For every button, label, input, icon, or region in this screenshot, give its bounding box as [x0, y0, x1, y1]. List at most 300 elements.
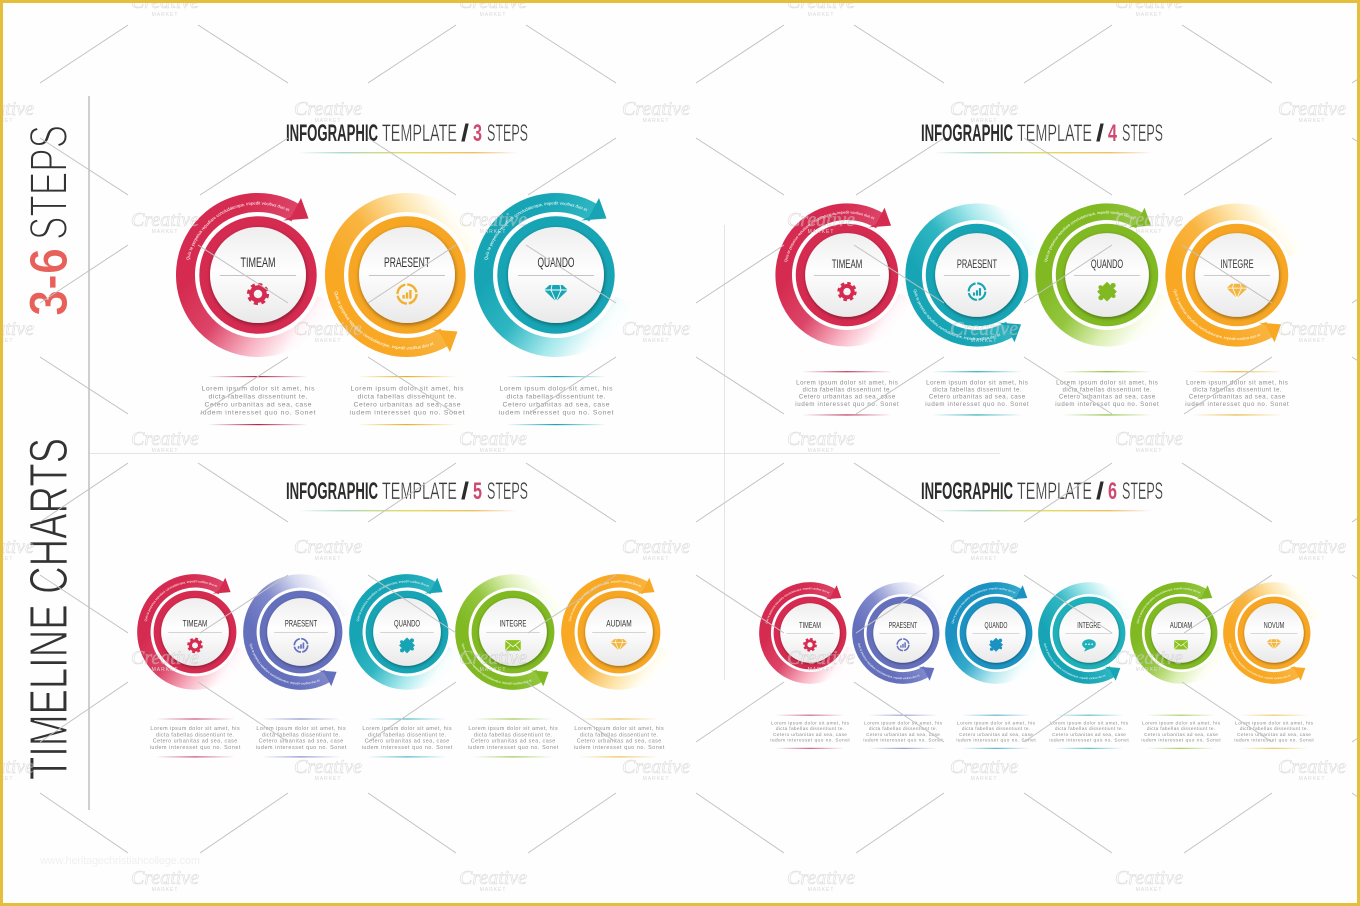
- text block: 4 steps PRAESENT: iudem interesset quo no. Sonet: [925, 401, 1029, 408]
- watermark logos: Creative: [787, 209, 855, 231]
- watermark logos: MARKET: [971, 118, 997, 124]
- title: 3 steps: [286, 120, 528, 153]
- arrow ring: [462, 581, 561, 686]
- text block: 6 steps TIMEAM: [770, 715, 850, 749]
- text block: 3 steps QUANDO: Lorem ipsum dolor sit amet, his: [500, 386, 613, 392]
- title: 3 steps: STEPS: [487, 120, 528, 147]
- disc: [359, 227, 455, 323]
- disc: [805, 233, 889, 317]
- text block: 4 steps INTEGRE: dicta fabellas dissentiunt te.: [1192, 386, 1282, 393]
- arrow ring: [185, 198, 326, 347]
- watermark logos: MARKET: [315, 338, 341, 344]
- title: 5 steps: 5: [473, 478, 482, 505]
- watermark logos: MARKET: [808, 667, 834, 673]
- disc: [1059, 603, 1119, 663]
- arrow ring: [858, 588, 945, 681]
- watermark logos: MARKET: [808, 12, 834, 18]
- step: PRAESENT: [324, 193, 477, 357]
- title: 3 steps: INFOGRAPHIC: [286, 120, 378, 147]
- arrow ring: [1229, 588, 1316, 681]
- arrow caption: Quis te perpetua repudiare concludaturque, impedit vocibus duo et: [144, 580, 217, 622]
- icon: puzzle: [989, 638, 1003, 652]
- text block: 6 steps PRAESENT: dicta fabellas dissentiunt te.: [869, 726, 937, 731]
- title: 6 steps: STEPS: [1122, 478, 1163, 505]
- text block: 6 steps QUANDO: dicta fabellas dissentiunt te.: [962, 726, 1030, 731]
- text block: 4 steps INTEGRE: Lorem ipsum dolor sit amet, his: [1186, 379, 1288, 386]
- watermark logos: MARKET: [1136, 12, 1162, 18]
- label: TIMEAM: [240, 255, 276, 270]
- title: 5 steps: [286, 478, 528, 511]
- inner ring: [472, 591, 554, 673]
- arrow ring: [356, 578, 455, 683]
- label: QUANDO: [1091, 258, 1123, 271]
- arrow caption: Quis te perpetua repudiare concludaturque, impedit vocibus duo et: [356, 580, 429, 622]
- text block: 3 steps QUANDO: Cetero urbanitas ad sea, case: [503, 402, 610, 408]
- watermark logos: Creative: [950, 756, 1018, 778]
- watermark logos: Creative: [787, 867, 855, 889]
- icon: diamond: [544, 285, 568, 302]
- title: 4 steps: TEMPLATE: [1017, 120, 1092, 147]
- title: 4 steps: STEPS: [1122, 120, 1163, 147]
- text block: 3 steps QUANDO: iudem interesset quo no. Sonet: [498, 410, 614, 416]
- text block: 6 steps PRAESENT: Cetero urbanitas ad sea, case: [866, 732, 940, 737]
- arrow caption: Quis te perpetua repudiare concludaturque, impedit vocibus duo et: [1044, 210, 1134, 262]
- arrow caption: Quis te perpetua repudiare concludaturque, impedit vocibus duo et: [858, 643, 920, 680]
- watermark logos: MARKET: [643, 776, 669, 782]
- text block: 4 steps TIMEAM: dicta fabellas dissentiunt te.: [802, 386, 892, 393]
- disc: [210, 227, 306, 323]
- disc: [873, 603, 933, 663]
- watermark logos: MARKET: [971, 556, 997, 562]
- step: PRAESENT: [852, 582, 941, 684]
- arrow caption: Quis te perpetua repudiare concludaturque, impedit vocibus duo et: [1044, 643, 1106, 680]
- watermark logos: MARKET: [1136, 887, 1162, 893]
- text block: 3 steps QUANDO: [498, 376, 614, 425]
- watermark logos: MARKET: [643, 338, 669, 344]
- watermark logos: MARKET: [1136, 229, 1162, 235]
- watermark logos: MARKET: [808, 448, 834, 454]
- label: QUANDO: [394, 618, 420, 629]
- text block: 4 steps TIMEAM: iudem interesset quo no. Sonet: [795, 401, 899, 408]
- disc: [267, 598, 335, 666]
- watermark logos: Creative: [131, 647, 199, 669]
- text block: 5 steps PRAESENT: Lorem ipsum dolor sit amet, his: [256, 726, 346, 732]
- icon: chat: [1082, 639, 1096, 652]
- label: PRAESENT: [285, 618, 317, 629]
- arrow ring: [765, 585, 852, 678]
- label: NOVUM: [1264, 620, 1284, 630]
- text block: 5 steps PRAESENT: dicta fabellas dissentiunt te.: [262, 732, 340, 738]
- watermark logos: Creative: [1115, 647, 1183, 669]
- label: AUDIAM: [606, 618, 632, 629]
- text block: 3 steps QUANDO: dicta fabellas dissentiunt te.: [506, 394, 606, 400]
- arrow caption: Quis te perpetua repudiare concludaturque, impedit vocibus duo et: [784, 210, 874, 262]
- text block: 4 steps QUANDO: [1055, 371, 1159, 415]
- title: 6 steps: /: [1096, 478, 1104, 505]
- watermark logos: MARKET: [480, 887, 506, 893]
- text block: 5 steps INTEGRE: dicta fabellas dissentiunt te.: [474, 732, 552, 738]
- icon: gear: [804, 639, 816, 651]
- watermark logos: Creative: [1278, 756, 1346, 778]
- watermark logos: MARKET: [152, 448, 178, 454]
- text block: 5 steps QUANDO: iudem interesset quo no. Sonet: [362, 745, 453, 751]
- disc: [1195, 233, 1279, 317]
- text block: 6 steps AUDIAM: iudem interesset quo no. Sonet: [1141, 737, 1221, 742]
- watermark logos: MARKET: [480, 667, 506, 673]
- inner ring: [1238, 597, 1310, 669]
- step: INTEGRE: [1038, 582, 1130, 684]
- text block: 5 steps AUDIAM: Cetero urbanitas ad sea, case: [577, 739, 661, 745]
- panel: 3 steps chart: [176, 193, 622, 357]
- text block: 6 steps TIMEAM: dicta fabellas dissentiunt te.: [776, 726, 844, 731]
- sidebar heading: [19, 125, 79, 780]
- step: QUANDO: [945, 582, 1036, 684]
- watermark logos: Creative: [294, 318, 362, 340]
- disc: [1244, 603, 1304, 663]
- step: AUDIAM: [561, 574, 668, 690]
- label: PRAESENT: [889, 620, 917, 630]
- title: 4 steps: [921, 120, 1163, 153]
- text block: 6 steps AUDIAM: Cetero urbanitas ad sea, case: [1144, 732, 1218, 737]
- watermark logos: MARKET: [971, 776, 997, 782]
- watermark logos: Creative: [294, 536, 362, 558]
- text block: 6 steps PRAESENT: iudem interesset quo no. Sonet: [863, 737, 943, 742]
- heading: 3-6: 3-6: [19, 248, 79, 316]
- watermark logos: Creative: [950, 98, 1018, 120]
- text block: 6 steps TIMEAM: Cetero urbanitas ad sea, case: [773, 732, 847, 737]
- watermark logos: Creative: [1115, 867, 1183, 889]
- sidebar vertical rule: [88, 96, 90, 810]
- arrow caption: Quis te perpetua repudiare concludaturque, impedit vocibus duo et: [913, 289, 1000, 340]
- inner ring: [366, 591, 448, 673]
- watermark logos: MARKET: [480, 229, 506, 235]
- text block: 6 steps INTEGRE: dicta fabellas dissentiunt te.: [1055, 726, 1123, 731]
- watermark logos: Creative: [622, 318, 690, 340]
- inner ring: [578, 591, 660, 673]
- watermark logos: Creative: [1278, 318, 1346, 340]
- title: 6 steps: INFOGRAPHIC: [921, 478, 1013, 505]
- text block: 6 steps AUDIAM: dicta fabellas dissentiunt te.: [1147, 726, 1215, 731]
- text block: 5 steps AUDIAM: dicta fabellas dissentiunt te.: [580, 732, 658, 738]
- inner ring: [774, 597, 846, 669]
- watermark logos: Creative: [1115, 428, 1183, 450]
- step: QUANDO: [474, 193, 622, 357]
- icon: puzzle: [399, 637, 415, 653]
- watermark logos: MARKET: [1299, 118, 1325, 124]
- watermark logos: Creative: [294, 98, 362, 120]
- text block: 6 steps INTEGRE: iudem interesset quo no. Sonet: [1049, 737, 1129, 742]
- watermark logos: MARKET: [480, 448, 506, 454]
- text block: 4 steps PRAESENT: Cetero urbanitas ad sea, case: [929, 394, 1026, 401]
- title: 4 steps: 4: [1108, 120, 1117, 147]
- disc: [508, 227, 604, 323]
- disc: [585, 598, 653, 666]
- text block: 6 steps QUANDO: Cetero urbanitas ad sea, case: [959, 732, 1033, 737]
- arrow caption: Quis te perpetua repudiare concludaturque, impedit vocibus duo et: [334, 292, 434, 350]
- disc: [479, 598, 547, 666]
- text block: 3 steps PRAESENT: Lorem ipsum dolor sit amet, his: [350, 386, 464, 392]
- arrow ring: [568, 578, 667, 683]
- watermark logos: MARKET: [1136, 448, 1162, 454]
- disc: [966, 603, 1026, 663]
- watermark logos: Creative: [1278, 98, 1346, 120]
- watermark logos: MARKET: [808, 887, 834, 893]
- watermark logos: Creative: [1278, 536, 1346, 558]
- text block: 4 steps PRAESENT: [925, 371, 1029, 415]
- watermark logos: Creative: [459, 209, 527, 231]
- arrow caption: Quis te perpetua repudiare concludaturque, impedit vocibus duo et: [1228, 643, 1291, 680]
- title: 5 steps: STEPS: [487, 478, 528, 505]
- text block: 6 steps QUANDO: [956, 715, 1036, 749]
- label: INTEGRE: [1077, 620, 1101, 630]
- disc: [373, 598, 441, 666]
- watermark logos: MARKET: [480, 12, 506, 18]
- watermark logos: Creative: [622, 536, 690, 558]
- text block: 6 steps NOVUM: Cetero urbanitas ad sea, case: [1237, 732, 1311, 737]
- text block: 4 steps QUANDO: dicta fabellas dissentiunt te.: [1062, 386, 1152, 393]
- inner ring: [1145, 597, 1217, 669]
- text block: 6 steps TIMEAM: iudem interesset quo no. Sonet: [770, 737, 850, 742]
- title: 6 steps: TEMPLATE: [1017, 478, 1092, 505]
- icon: chart: [969, 283, 985, 300]
- watermark logos: MARKET: [152, 229, 178, 235]
- label: AUDIAM: [1170, 620, 1192, 630]
- text block: 6 steps INTEGRE: [1049, 715, 1129, 749]
- text block: 4 steps INTEGRE: [1185, 371, 1289, 415]
- step: TIMEAM: [775, 203, 904, 347]
- title: 6 steps: [921, 478, 1163, 511]
- title: 4 steps: /: [1096, 120, 1104, 147]
- watermark logos: Creative: [1115, 209, 1183, 231]
- step: NOVUM: [1223, 582, 1317, 684]
- icon: chart: [897, 639, 909, 651]
- arrow ring: [334, 203, 475, 352]
- text block: 4 steps QUANDO: Lorem ipsum dolor sit amet, his: [1056, 379, 1158, 386]
- watermark logos: MARKET: [1299, 556, 1325, 562]
- icon: gear: [839, 283, 855, 300]
- watermark logos: Creative: [787, 647, 855, 669]
- watermark logos: Creative: [131, 867, 199, 889]
- inner ring: [199, 216, 317, 334]
- watermark logos: MARKET: [315, 776, 341, 782]
- text block: 5 steps PRAESENT: [256, 719, 347, 757]
- label: TIMEAM: [183, 618, 207, 629]
- text block: 4 steps QUANDO: iudem interesset quo no. Sonet: [1055, 401, 1159, 408]
- text block: 3 steps TIMEAM: [200, 376, 316, 425]
- icon: gear: [188, 639, 202, 652]
- panel: 5 steps chart: [137, 574, 668, 690]
- text block: 6 steps PRAESENT: [863, 715, 943, 749]
- text block: 4 steps PRAESENT: dicta fabellas dissentiunt te.: [932, 386, 1022, 393]
- text block: 4 steps QUANDO: Cetero urbanitas ad sea, case: [1059, 394, 1156, 401]
- arrow ring: [1174, 212, 1296, 342]
- label: PRAESENT: [957, 258, 997, 271]
- text block: 5 steps QUANDO: dicta fabellas dissentiunt te.: [368, 732, 446, 738]
- title: 5 steps: TEMPLATE: [382, 478, 457, 505]
- arrow ring: [914, 212, 1036, 342]
- title: 6 steps: 6: [1108, 478, 1117, 505]
- text block: 5 steps TIMEAM: Cetero urbanitas ad sea, case: [153, 739, 237, 745]
- watermark logos: MARKET: [152, 887, 178, 893]
- icon: diamond: [1267, 639, 1281, 649]
- arrow ring: [1136, 585, 1223, 678]
- watermark logos: Creative: [459, 428, 527, 450]
- step: PRAESENT: [243, 574, 344, 690]
- disc: [1065, 233, 1149, 317]
- text block: 4 steps INTEGRE: Cetero urbanitas ad sea, case: [1189, 394, 1286, 401]
- text block: 5 steps QUANDO: Cetero urbanitas ad sea, case: [365, 739, 449, 745]
- step: AUDIAM: [1130, 582, 1223, 684]
- disc: [780, 603, 840, 663]
- watermark logos: Creative: [459, 647, 527, 669]
- inner ring: [260, 591, 342, 673]
- label: INTEGRE: [1220, 258, 1254, 271]
- text block: 3 steps TIMEAM: iudem interesset quo no. Sonet: [200, 410, 316, 416]
- text block: 6 steps NOVUM: dicta fabellas dissentiunt te.: [1240, 726, 1308, 731]
- text block: 4 steps TIMEAM: [795, 371, 899, 415]
- panel: 6 steps chart: [759, 582, 1317, 684]
- step: TIMEAM: [176, 193, 322, 357]
- text block: 4 steps INTEGRE: iudem interesset quo no. Sonet: [1185, 401, 1289, 408]
- text block: 6 steps INTEGRE: Lorem ipsum dolor sit amet, his: [1050, 721, 1129, 726]
- title: 5 steps: INFOGRAPHIC: [286, 478, 378, 505]
- watermark logos: MARKET: [152, 667, 178, 673]
- text block: 5 steps TIMEAM: iudem interesset quo no. Sonet: [150, 745, 241, 751]
- text block: 5 steps QUANDO: [362, 719, 453, 757]
- icon: puzzle: [1097, 282, 1117, 301]
- arrow caption: Quis te perpetua repudiare concludaturque, impedit vocibus duo et: [1173, 289, 1260, 340]
- heading: STEPS: STEPS: [19, 125, 79, 240]
- step: TIMEAM: [137, 574, 240, 690]
- watermark logos: Creative: [622, 98, 690, 120]
- icon: diamond: [611, 639, 627, 651]
- text block: 5 steps INTEGRE: [468, 719, 559, 757]
- arrow caption: Quis te perpetua repudiare concludaturque, impedit vocibus duo et: [1136, 587, 1200, 624]
- text block: 3 steps PRAESENT: Cetero urbanitas ad sea, case: [354, 402, 461, 408]
- arrow ring: [144, 578, 243, 683]
- text block: 6 steps PRAESENT: Lorem ipsum dolor sit amet, his: [864, 721, 943, 726]
- watermark logos: MARKET: [1299, 776, 1325, 782]
- text block: 4 steps PRAESENT: Lorem ipsum dolor sit amet, his: [926, 379, 1028, 386]
- disc: [1151, 603, 1211, 663]
- inner ring: [960, 597, 1032, 669]
- text block: 6 steps NOVUM: [1234, 715, 1314, 749]
- watermark logos: Creative: [950, 536, 1018, 558]
- step: QUANDO: [1035, 203, 1166, 347]
- arrow caption: Quis te perpetua repudiare concludaturque, impedit vocibus duo et: [462, 644, 532, 685]
- inner ring: [926, 224, 1028, 326]
- step: INTEGRE: [455, 574, 560, 690]
- inner ring: [1186, 224, 1288, 326]
- text block: 5 steps TIMEAM: Lorem ipsum dolor sit amet, his: [150, 726, 240, 732]
- text block: 5 steps PRAESENT: iudem interesset quo no. Sonet: [256, 745, 347, 751]
- text block: 5 steps AUDIAM: [574, 719, 665, 757]
- text block: 3 steps PRAESENT: [350, 376, 465, 425]
- watermark logos: Creative: [131, 428, 199, 450]
- panel dividers: [90, 225, 1000, 680]
- title: 3 steps: 3: [473, 120, 482, 147]
- text block: 6 steps NOVUM: Lorem ipsum dolor sit amet, his: [1235, 721, 1314, 726]
- step: TIMEAM: [759, 582, 850, 684]
- inner ring: [1056, 224, 1158, 326]
- text block: 6 steps AUDIAM: [1141, 715, 1221, 749]
- arrow ring: [1044, 588, 1131, 681]
- inner ring: [796, 224, 898, 326]
- arrow ring: [784, 208, 906, 338]
- icon: chart: [398, 284, 416, 304]
- arrow caption: Quis te perpetua repudiare concludaturque, impedit vocibus duo et: [766, 587, 830, 624]
- disc: [935, 233, 1019, 317]
- text block: 5 steps PRAESENT: Cetero urbanitas ad sea, case: [259, 739, 343, 745]
- watermark logos: MARKET: [1299, 338, 1325, 344]
- text block: 5 steps INTEGRE: iudem interesset quo no. Sonet: [468, 745, 559, 751]
- arrow ring: [483, 198, 624, 347]
- watermark logos: Creative: [294, 756, 362, 778]
- watermark logos: Creative: [950, 318, 1018, 340]
- label: QUANDO: [985, 620, 1008, 630]
- watermark logos: MARKET: [808, 229, 834, 235]
- arrow caption: Quis te perpetua repudiare concludaturque, impedit vocibus duo et: [186, 201, 290, 260]
- text block: 5 steps AUDIAM: Lorem ipsum dolor sit amet, his: [574, 726, 664, 732]
- text block: 3 steps PRAESENT: iudem interesset quo no. Sonet: [349, 410, 465, 416]
- icon: chart: [294, 639, 308, 652]
- step: INTEGRE: [1165, 203, 1298, 347]
- text block: 3 steps TIMEAM: Lorem ipsum dolor sit amet, his: [202, 386, 315, 392]
- text block: 6 steps TIMEAM: Lorem ipsum dolor sit amet, his: [771, 721, 850, 726]
- icon: gear: [248, 284, 268, 304]
- text block: 5 steps INTEGRE: Cetero urbanitas ad sea, case: [471, 739, 555, 745]
- disc: [161, 598, 229, 666]
- text block: 6 steps NOVUM: iudem interesset quo no. Sonet: [1234, 737, 1314, 742]
- arrow ring: [250, 581, 349, 686]
- watermark logos: Creative: [787, 428, 855, 450]
- label: QUANDO: [538, 255, 574, 270]
- watermark logos: Creative: [459, 867, 527, 889]
- text block: 5 steps QUANDO: Lorem ipsum dolor sit amet, his: [362, 726, 452, 732]
- label: TIMEAM: [799, 620, 821, 630]
- title: 4 steps: INFOGRAPHIC: [921, 120, 1013, 147]
- text block: 6 steps QUANDO: iudem interesset quo no. Sonet: [956, 737, 1036, 742]
- arrow ring: [1044, 208, 1166, 338]
- step: QUANDO: [349, 574, 454, 690]
- arrow caption: Quis te perpetua repudiare concludaturque, impedit vocibus duo et: [484, 201, 588, 260]
- icon: envelope: [505, 640, 521, 651]
- icon: diamond: [1227, 284, 1247, 298]
- text block: 3 steps TIMEAM: Cetero urbanitas ad sea, case: [205, 402, 312, 408]
- watermark logos: MARKET: [315, 556, 341, 562]
- title: 3 steps: /: [461, 120, 469, 147]
- watermark logos: MARKET: [315, 118, 341, 124]
- label: PRAESENT: [384, 255, 430, 270]
- icon: envelope: [1174, 640, 1188, 649]
- inner ring: [154, 591, 236, 673]
- watermark logos: Creative: [622, 756, 690, 778]
- step: PRAESENT: [905, 203, 1034, 347]
- inner ring: [348, 216, 466, 334]
- arrow ring: [951, 585, 1038, 678]
- label: INTEGRE: [500, 618, 526, 629]
- inner ring: [1053, 597, 1125, 669]
- text block: 6 steps QUANDO: Lorem ipsum dolor sit amet, his: [957, 721, 1036, 726]
- text block: 5 steps AUDIAM: iudem interesset quo no. Sonet: [574, 745, 665, 751]
- heading: TIMELINE CHARTS: TIMELINE CHARTS: [19, 438, 79, 780]
- text block: 5 steps TIMEAM: [150, 719, 241, 757]
- watermark logos: MARKET: [152, 12, 178, 18]
- arrow caption: Quis te perpetua repudiare concludaturque, impedit vocibus duo et: [250, 644, 320, 685]
- text block: 3 steps PRAESENT: dicta fabellas dissentiunt te.: [358, 394, 457, 400]
- arrow caption: Quis te perpetua repudiare concludaturque, impedit vocibus duo et: [568, 580, 641, 622]
- title: 5 steps: /: [461, 478, 469, 505]
